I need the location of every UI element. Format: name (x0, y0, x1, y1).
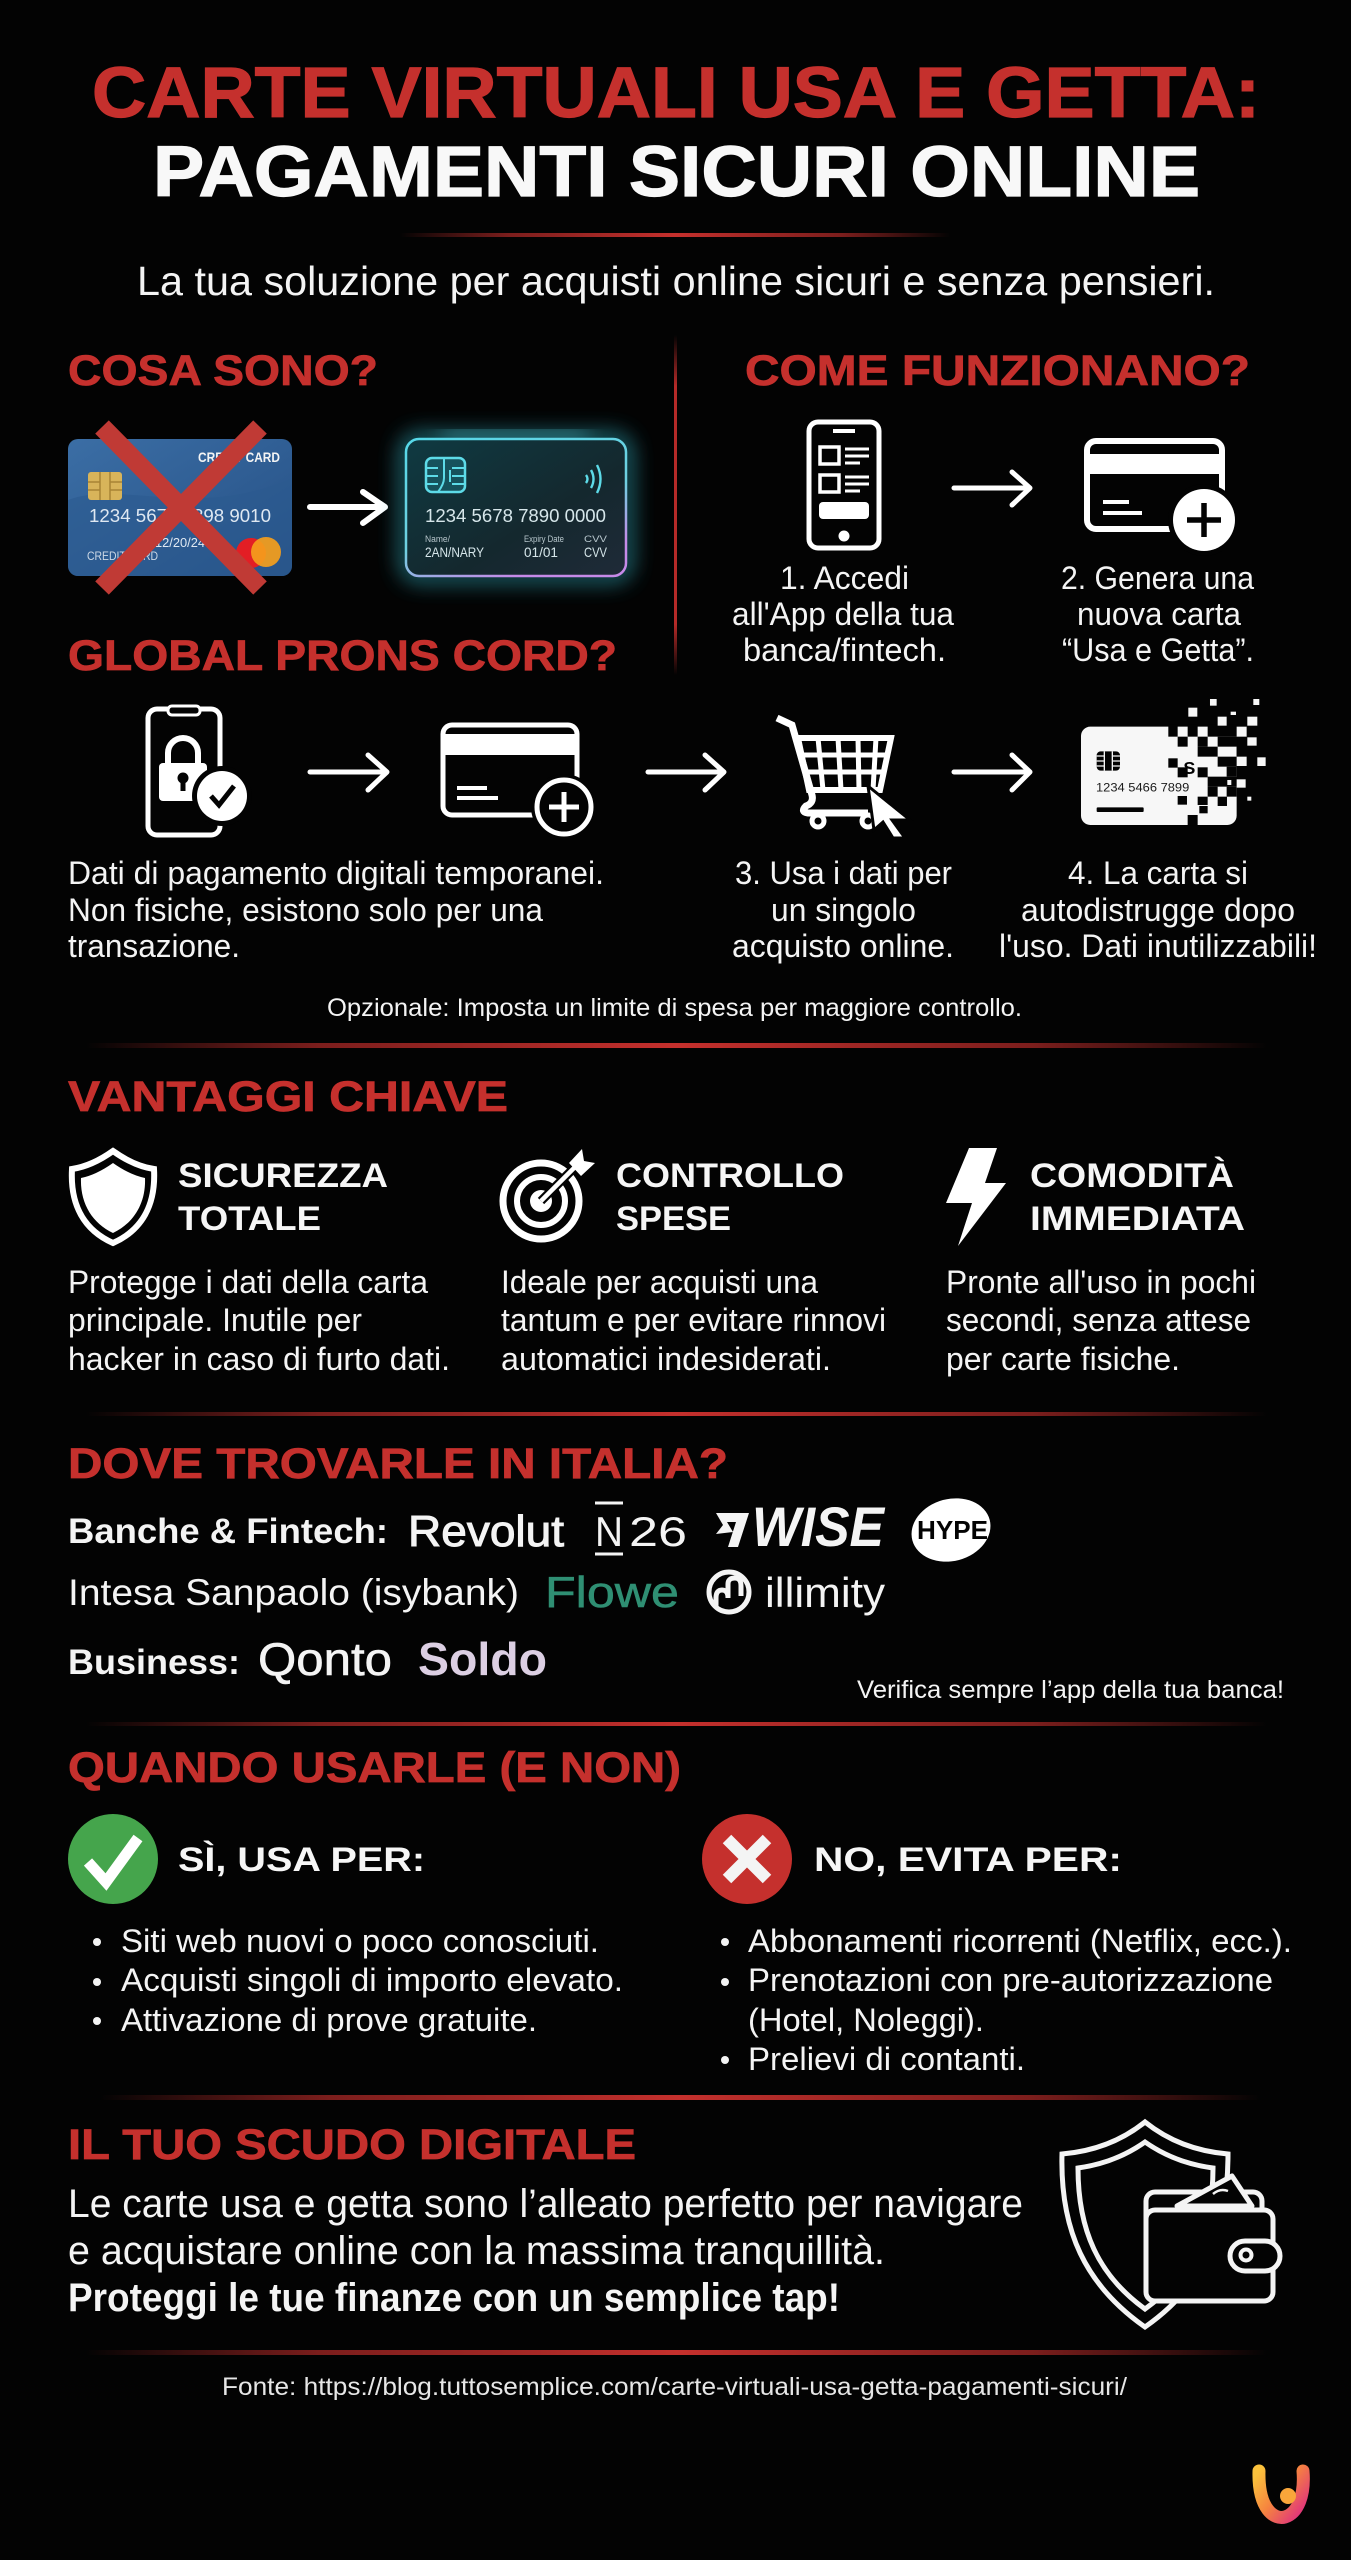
icon: self-destructing card (1081, 699, 1266, 826)
list: si: Attivazione di prove gratuite. (121, 2002, 537, 2038)
icon: glowing virtual card: 2AN/NARY (425, 544, 485, 560)
benefit text 1 (68, 1264, 450, 1377)
arrow (954, 755, 1030, 790)
closing text: e acquistare online con la massima tranquillità. (68, 2229, 885, 2273)
heading: cosa sono: COSA SONO? (68, 347, 378, 395)
benefit: comodita immediata: COMODITÀ (1030, 1157, 1234, 1195)
step 2 text: 2. Genera una (1061, 560, 1254, 596)
title: PAGAMENTI SICURI ONLINE (153, 133, 1200, 212)
list: no: Prenotazioni con pre-autorizzazione (748, 1962, 1273, 1998)
logo: soldo: Soldo (418, 1633, 547, 1685)
icon: crossed out physical card: CREDIT CARD (87, 549, 158, 563)
description text: transazione. (68, 928, 240, 964)
icon: shield (72, 1151, 154, 1243)
logo: illimity: illimity (765, 1569, 885, 1616)
text: intesa sanpaolo: Intesa Sanpaolo (isybank) (68, 1572, 519, 1613)
benefit: comodita immediata (1030, 1157, 1245, 1238)
icon: target with arrow (503, 1149, 595, 1239)
icon: shopping cart (777, 718, 910, 838)
icon: shield with wallet (1062, 2122, 1280, 2327)
list: no: Abbonamenti ricorrenti (Netflix, ecc.). (748, 1923, 1292, 1959)
benefit text 1: hacker in caso di furto dati. (68, 1341, 450, 1377)
step 1 text: 1. Accedi (780, 560, 909, 596)
list: no: Prelievi di contanti. (748, 2041, 1025, 2077)
step 2 text: nuova carta (1077, 596, 1241, 632)
benefit: sicurezza totale: TOTALE (178, 1200, 321, 1238)
logo: brand mark (1259, 2471, 1303, 2517)
closing text: Le carte usa e getta sono l’alleato perfetto per navigare (68, 2182, 1023, 2226)
benefit: controllo spese: CONTROLLO (616, 1157, 844, 1195)
arrow (310, 755, 387, 790)
icon: crossed out physical card: 1234 5678 7898 9010 (89, 506, 271, 526)
benefit: sicurezza totale: SICUREZZA (178, 1157, 388, 1195)
icon: red cross (702, 1814, 792, 1904)
step 2 text (1061, 560, 1254, 668)
closing text: Proteggi le tue finanze con un semplice tap! (68, 2276, 840, 2320)
arrow (310, 492, 385, 523)
list: si (93, 1923, 623, 2038)
heading: quando usarle: QUANDO USARLE (E NON) (68, 1744, 681, 1792)
benefit: comodita immediata: IMMEDIATA (1030, 1200, 1245, 1238)
icon: glowing virtual card (406, 431, 626, 576)
heading: il tuo scudo digitale: IL TUO SCUDO DIGITALE (68, 2121, 636, 2169)
benefit text 1: Protegge i dati della carta (68, 1264, 428, 1300)
heading: dove trovarle: DOVE TROVARLE IN ITALIA? (68, 1440, 728, 1488)
step 3 text: 3. Usa i dati per (735, 855, 952, 891)
icon: card with outlined plus (443, 725, 597, 840)
source: Fonte: https://blog.tuttosemplice.com/carte-virtuali-usa-getta-pagamenti-sicuri/ (222, 2373, 1127, 2401)
icon: glowing virtual card: CVV (584, 544, 608, 560)
benefit text 2: automatici indesiderati. (501, 1341, 831, 1377)
label: banche e fintech: Banche & Fintech: (68, 1512, 388, 1551)
list: si: Siti web nuovi o poco conosciuti. (121, 1923, 599, 1959)
step 3 text (732, 855, 954, 964)
logo: n26: 26 (629, 1508, 687, 1555)
arrow (648, 755, 724, 790)
icon: glowing virtual card: CVV (584, 534, 607, 544)
benefit: controllo spese (616, 1157, 844, 1238)
benefit: controllo spese: SPESE (616, 1200, 731, 1238)
logo: hype: HYPE (917, 1515, 988, 1545)
heading: no evita per: NO, EVITA PER: (814, 1841, 1122, 1879)
list: si: Acquisti singoli di importo elevato. (121, 1962, 623, 1998)
icon: phone app (809, 422, 879, 548)
heading: vantaggi chiave: VANTAGGI CHIAVE (68, 1073, 508, 1121)
heading: global prons cord: GLOBAL PRONS CORD? (68, 632, 617, 680)
step 4 text (999, 855, 1317, 964)
description text (68, 855, 604, 964)
benefit text 2: Ideale per acquisti una (501, 1264, 818, 1300)
logo: qonto: Qonto (258, 1633, 392, 1685)
icon: self-destructing card: S (1183, 758, 1195, 778)
benefit text 2 (501, 1264, 886, 1377)
icon: crossed out physical card: 12/20/24 (155, 535, 205, 550)
icon: self-destructing card: 1234 5466 7899 (1096, 781, 1190, 795)
step 1 text (732, 560, 954, 668)
step 1 text: all'App della tua (732, 596, 954, 632)
heading: come funzionano: COME FUNZIONANO? (745, 347, 1250, 395)
logo: n26: N (595, 1508, 623, 1555)
description text: Dati di pagamento digitali temporanei. (68, 855, 604, 891)
description text: Non fisiche, esistono solo per una (68, 892, 543, 928)
benefit text 2: tantum e per evitare rinnovi (501, 1302, 886, 1338)
icon: glowing virtual card: Name/ (425, 534, 450, 544)
logo: illimity (709, 1569, 885, 1616)
benefit text 3: secondi, senza attese (946, 1302, 1251, 1338)
step 3 text: acquisto online. (732, 928, 954, 964)
note: verifica: Verifica sempre l’app della tua banca! (857, 1676, 1284, 1704)
icon: glowing virtual card: 01/01 (524, 544, 558, 560)
benefit: sicurezza totale (178, 1157, 388, 1238)
heading: si usa per: SÌ, USA PER: (178, 1841, 425, 1879)
icon: glowing virtual card: Expiry Date (524, 534, 564, 544)
icon: phone with lock (148, 706, 252, 835)
step 2 text: “Usa e Getta”. (1062, 632, 1254, 668)
icon: new card plus (1087, 441, 1240, 556)
optional note: Opzionale: Imposta un limite di spesa per maggiore controllo. (327, 994, 1022, 1022)
icon: crossed out physical card (68, 427, 292, 588)
icon: crossed out physical card: CREDIT CARD (198, 449, 280, 465)
benefit text 1: principale. Inutile per (68, 1302, 362, 1338)
title: CARTE VIRTUALI USA E GETTA: (92, 54, 1260, 133)
title (92, 54, 1260, 212)
arrow (954, 472, 1030, 505)
logo: revolut: Revolut (408, 1507, 564, 1556)
icon: green check (68, 1814, 158, 1904)
logo: n26 (595, 1503, 687, 1555)
subtitle: La tua soluzione per acquisti online sicuri e senza pensieri. (137, 258, 1215, 304)
step 1 text: banca/fintech. (743, 632, 946, 668)
list: no (721, 1923, 1292, 2077)
benefit text 3: Pronte all'uso in pochi (946, 1264, 1256, 1300)
step 3 text: un singolo (771, 892, 916, 928)
label: business: Business: (68, 1643, 240, 1682)
closing text (68, 2182, 1023, 2320)
logo: hype (904, 1490, 998, 1570)
step 4 text: 4. La carta si (1068, 855, 1248, 891)
icon: glowing virtual card: 1234 5678 7890 0000 (425, 506, 606, 526)
benefit text 3 (946, 1264, 1256, 1377)
list: no: (Hotel, Noleggi). (748, 2002, 984, 2038)
logo: wise: WISE (752, 1495, 886, 1558)
icon: lightning bolt (946, 1148, 1006, 1246)
logo: flowe: Flowe (545, 1568, 679, 1617)
benefit text 3: per carte fisiche. (946, 1341, 1180, 1377)
step 4 text: autodistrugge dopo (1021, 892, 1295, 928)
step 4 text: l'uso. Dati inutilizzabili! (999, 928, 1317, 964)
